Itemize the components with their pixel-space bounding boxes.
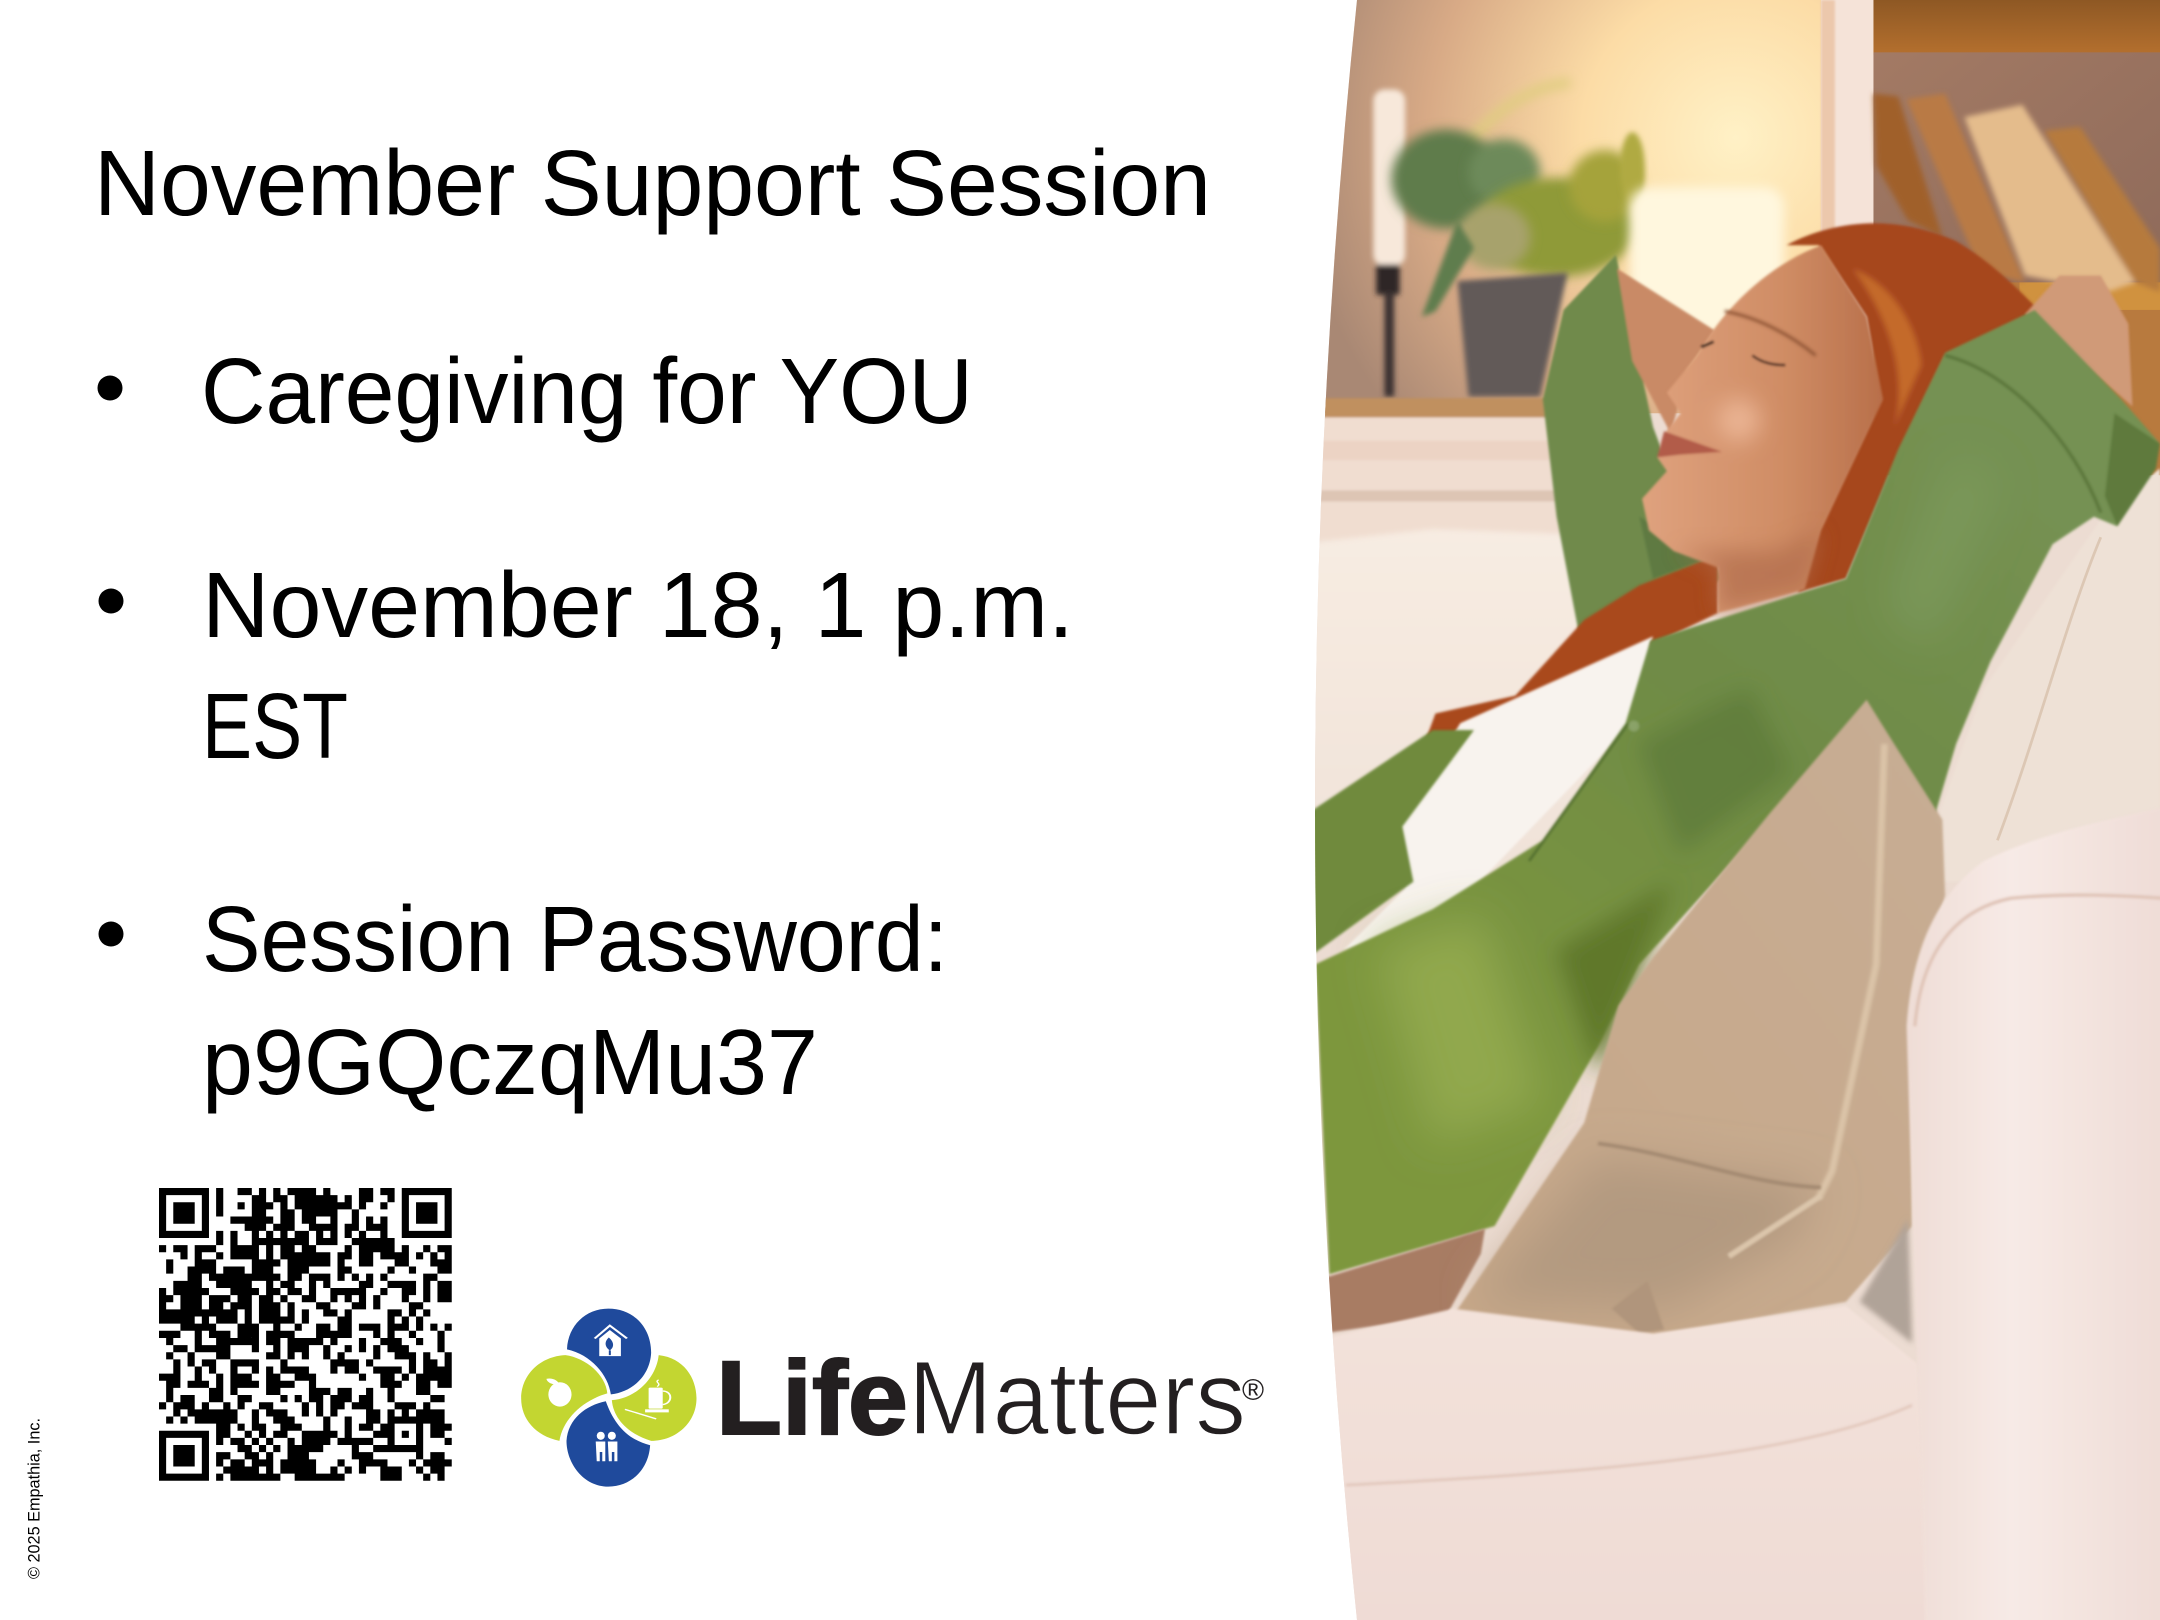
hand behind the head bbox=[2025, 276, 2132, 406]
logo wordmark: ® bbox=[1242, 1374, 1264, 1407]
bullet: session password: p9GQczqMu37 bbox=[202, 1010, 818, 1114]
potted plant bbox=[1391, 83, 1645, 397]
raised left sleeve and arm bbox=[1543, 255, 1722, 661]
white top bbox=[1343, 636, 1653, 951]
bullet: date and time: November 18, 1 p.m. bbox=[202, 553, 1074, 657]
bullet: session password: Session Password: bbox=[202, 887, 948, 991]
white cushion behind the woman bbox=[2150, 468, 2160, 476]
shadow between pillow and sofa arm bbox=[1860, 1219, 1912, 1343]
QR code bbox=[159, 1192, 452, 1477]
wooden shelf and white cabinet bbox=[1320, 396, 1556, 540]
sofa back cushion bbox=[1315, 529, 1593, 804]
bullet: session topic: Caregiving for YOU bbox=[201, 339, 973, 443]
logo wordmark: Life bbox=[716, 1340, 908, 1457]
face and neck bbox=[1642, 245, 1883, 613]
logo wordmark bbox=[716, 1340, 1264, 1457]
title: November Support Session bbox=[94, 131, 1211, 235]
lower left sleeve bbox=[1309, 730, 1474, 957]
photo backing bbox=[1295, 0, 2160, 1620]
sofa seat cushion bbox=[1322, 1306, 1929, 1620]
books on shelf bbox=[1873, 94, 2160, 292]
top blue petal with house icon bbox=[567, 1309, 651, 1394]
logo wordmark: Matters bbox=[908, 1340, 1246, 1457]
bullet: date and time bbox=[98, 553, 1074, 778]
right lime petal with cup icon bbox=[612, 1355, 696, 1441]
sofa arm bbox=[1907, 806, 2160, 1620]
copyright notice: © 2025 Empathia, Inc. bbox=[24, 1418, 44, 1579]
LifeMatters logo bbox=[521, 1309, 1264, 1487]
beige pillow bbox=[1453, 700, 1945, 1336]
bottom blue petal with people icon bbox=[567, 1401, 650, 1487]
green shirt and right arm bbox=[1316, 310, 2160, 1274]
candle and holder bbox=[1373, 90, 1405, 397]
bare thigh bbox=[1322, 1229, 1485, 1333]
photo: woman relaxing on a sofa bbox=[1295, 0, 2160, 1620]
left lime petal with apple icon bbox=[521, 1355, 607, 1441]
bullet list bbox=[98, 339, 1074, 1114]
long red hair bbox=[1426, 223, 2039, 740]
bullet: date and time: EST bbox=[202, 674, 348, 778]
bullet: session password bbox=[98, 887, 948, 1114]
logo emblem bbox=[521, 1309, 696, 1487]
room background bbox=[1295, 0, 2160, 475]
glowing lamp bbox=[1630, 187, 1784, 339]
